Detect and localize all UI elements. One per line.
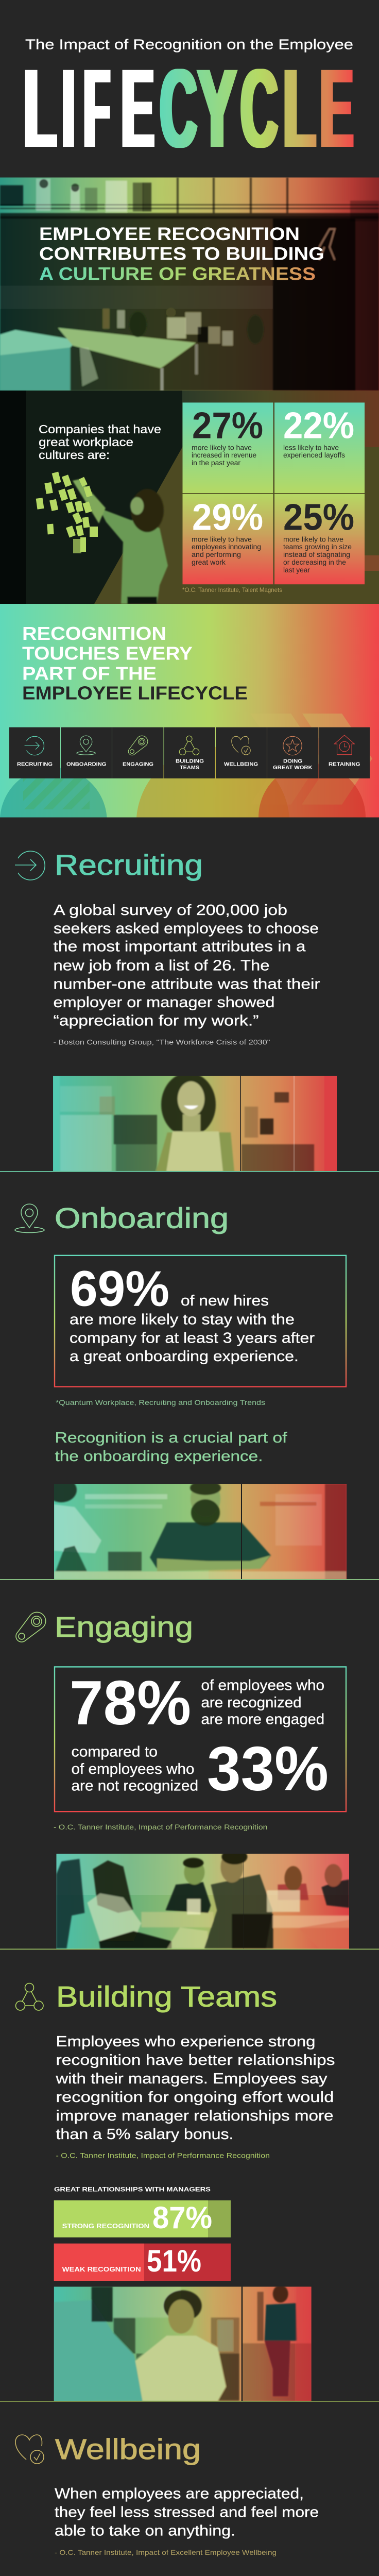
body text: employer or manager showed bbox=[54, 994, 275, 1011]
heading: employee recognition culture bbox=[39, 224, 324, 284]
title: LIFECYCLE: L bbox=[24, 46, 57, 171]
callout box: 69%: are more likely to stay with the bbox=[70, 1311, 295, 1328]
section: onboarding bbox=[15, 1202, 347, 1580]
callout box: 78% vs 33%: are not recognized bbox=[71, 1778, 198, 1794]
body text: “appreciation for my work.” bbox=[54, 1013, 259, 1029]
body text: they feel less stressed and feel more bbox=[55, 2504, 319, 2521]
bar chart: relationship with managers bbox=[54, 2200, 231, 2281]
heading: Onboarding bbox=[55, 1202, 229, 1234]
section: engaging bbox=[16, 1611, 349, 1949]
item: engaging: ENGAGING bbox=[123, 761, 153, 767]
callout box: 69%: 69% bbox=[70, 1261, 169, 1317]
callout box: 78% vs 33% bbox=[55, 1667, 346, 1811]
callout box: 78% vs 33%: of employees who bbox=[201, 1677, 324, 1694]
body text: number-one attribute was that their bbox=[54, 976, 320, 992]
panel: great workplace culture statistics bbox=[39, 402, 365, 594]
body text: recognition have better relationships bbox=[56, 2052, 335, 2069]
highlighted statement: the onboarding experience. bbox=[55, 1448, 263, 1465]
item: doing great work bbox=[273, 736, 313, 771]
heading: TOUCHES EVERY bbox=[22, 642, 193, 664]
stat card: 27%: in the past year bbox=[192, 459, 241, 467]
item: onboarding: ONBOARDING bbox=[66, 761, 107, 767]
stat card: 29%: employees innovating bbox=[192, 543, 261, 551]
stat card: 25%: or decreasing in the bbox=[283, 558, 346, 566]
body text: improve manager relationships more bbox=[56, 2108, 334, 2124]
stat card: 25%: more likely to have bbox=[283, 536, 343, 544]
stat card: 29%: more likely to have bbox=[192, 536, 252, 544]
header: title block bbox=[24, 37, 353, 171]
stat card: 27%: more likely to have bbox=[192, 444, 252, 452]
photo: team around a table bbox=[57, 1854, 349, 1948]
stat card: 29%: and performing bbox=[192, 551, 241, 558]
callout box: 78% vs 33%: are recognized bbox=[201, 1694, 302, 1711]
photo: open office with gradient overlay bbox=[0, 177, 379, 391]
source note: - Boston Consulting Group, "The Workforce Crisis of 2030" bbox=[54, 1038, 270, 1046]
body text: Employees who experience strong bbox=[56, 2033, 315, 2050]
body text: than a 5% salary bonus. bbox=[56, 2126, 234, 2143]
icon: heart with check bbox=[15, 2435, 44, 2464]
stat card: 29%: 29% bbox=[192, 497, 263, 538]
text: intro to stats bbox=[39, 422, 161, 462]
heading: employee recognition culture: CONTRIBUTES TO BUILDING bbox=[39, 244, 324, 264]
body text: the most important attributes in a bbox=[54, 939, 306, 955]
bar: strong recognition 87% bbox=[54, 2200, 231, 2238]
body text bbox=[55, 2486, 319, 2539]
callout box: 78% vs 33%: 33% bbox=[207, 1733, 329, 1803]
stat card: 25%: 25% bbox=[283, 497, 354, 538]
text: intro to stats: great workplace bbox=[39, 435, 133, 449]
body text: When employees are appreciated, bbox=[55, 2486, 304, 2502]
body text bbox=[55, 2033, 335, 2143]
source note: *Quantum Workplace, Recruiting and Onboarding Trends bbox=[56, 1398, 265, 1406]
section: recruiting bbox=[15, 849, 337, 1172]
bar: strong recognition 87%: STRONG RECOGNITION bbox=[62, 2222, 149, 2230]
stat card: 25%: last year bbox=[283, 566, 311, 574]
item: recruiting: RECRUITING bbox=[17, 761, 53, 767]
photo: bearded man writing bbox=[54, 1484, 347, 1579]
callout box: 69% bbox=[55, 1256, 346, 1387]
item: building teams: TEAMS bbox=[180, 765, 199, 771]
stat card: 27%: 27% bbox=[192, 405, 263, 447]
highlighted statement: Recognition is a crucial part of bbox=[55, 1430, 287, 1446]
title: LIFECYCLE bbox=[24, 46, 353, 171]
text: intro to stats: Companies that have bbox=[39, 422, 161, 436]
source note: *O.C. Tanner Institute, Talent Magnets bbox=[182, 586, 282, 594]
text: intro to stats: cultures are: bbox=[39, 448, 110, 462]
body text: recognition for ongoing effort would bbox=[56, 2089, 334, 2106]
callout box: 69%: of new hires bbox=[181, 1293, 269, 1309]
title: LIFECYCLE: L bbox=[283, 46, 316, 171]
item: onboarding bbox=[66, 736, 107, 767]
item: wellbeing: WELLBEING bbox=[224, 761, 258, 767]
body text: A global survey of 200,000 job bbox=[54, 902, 287, 919]
chart label: GREAT RELATIONSHIPS WITH MANAGERS bbox=[54, 2186, 211, 2193]
icon: arrow in circle bbox=[15, 851, 45, 880]
icon: team nodes bbox=[15, 1984, 43, 2010]
item: wellbeing bbox=[224, 736, 258, 767]
title: LIFECYCLE: E bbox=[122, 46, 154, 171]
heading bbox=[22, 623, 248, 704]
item: doing great work: DOING bbox=[283, 758, 302, 765]
body text bbox=[54, 902, 320, 1029]
heading: EMPLOYEE LIFECYCLE bbox=[22, 683, 248, 704]
heading: employee recognition culture: A CULTURE OF GREATNESS bbox=[39, 264, 316, 284]
photo: woman placing sticky notes on a wall bbox=[0, 391, 379, 604]
body text: able to take on anything. bbox=[55, 2523, 235, 2539]
callout box: 78% vs 33%: compared to bbox=[71, 1743, 158, 1760]
title: LIFECYCLE: C bbox=[160, 46, 197, 171]
icon strip navigation bbox=[9, 727, 370, 778]
section: wellbeing bbox=[15, 2433, 338, 2576]
title: LIFECYCLE: C bbox=[241, 46, 278, 171]
callout box: 69%: a great onboarding experience. bbox=[70, 1348, 299, 1365]
heading: Wellbeing bbox=[55, 2433, 201, 2465]
bar: strong recognition 87%: 87% bbox=[152, 2200, 212, 2235]
callout box: 78% vs 33%: 78% bbox=[70, 1668, 191, 1738]
title: LIFECYCLE: F bbox=[84, 46, 110, 171]
heading: employee recognition culture: EMPLOYEE RECOGNITION bbox=[39, 224, 300, 244]
source note: - O.C. Tanner Institute, Impact of Excellent Employee Wellbeing bbox=[55, 2548, 277, 2556]
highlighted statement bbox=[55, 1430, 287, 1465]
stat card: 22%: experienced layoffs bbox=[283, 451, 345, 459]
body text: new job from a list of 26. The bbox=[54, 957, 270, 974]
bar: weak recognition 51%: WEAK RECOGNITION bbox=[62, 2265, 141, 2273]
icon: map pin bbox=[15, 1204, 44, 1232]
section: building teams bbox=[15, 1980, 335, 2401]
source note: - O.C. Tanner Institute, Impact of Performance Recognition bbox=[54, 1823, 268, 1831]
item: retaining: RETAINING bbox=[329, 761, 360, 767]
callout box: 78% vs 33%: of employees who bbox=[71, 1761, 195, 1777]
item: building teams bbox=[176, 736, 204, 771]
stat card: 25%: instead of stagnating bbox=[283, 551, 350, 558]
body text: seekers asked employees to choose bbox=[54, 920, 319, 937]
icon: linked gears bbox=[16, 1612, 46, 1642]
heading: Building Teams bbox=[56, 1980, 277, 2013]
callout box: 69%: company for at least 3 years after bbox=[70, 1330, 315, 1347]
stat card: 27% bbox=[182, 402, 273, 493]
kicker heading: The Impact of Recognition on the Employee bbox=[25, 37, 353, 53]
panel: recognition touches every part of the lifecycle bbox=[0, 604, 379, 817]
stat card: 27%: increased in revenue bbox=[192, 451, 256, 459]
item: recruiting bbox=[17, 736, 53, 767]
item: building teams: BUILDING bbox=[176, 758, 204, 765]
body text: with their managers. Employees say bbox=[55, 2071, 328, 2087]
stat card: 25% bbox=[274, 494, 365, 584]
heading: PART OF THE bbox=[22, 663, 157, 684]
source note: - O.C. Tanner Institute, Impact of Performance Recognition bbox=[56, 2151, 270, 2160]
photo: smiling woman in office bbox=[53, 1076, 337, 1171]
bar: weak recognition 51% bbox=[54, 2244, 231, 2281]
photo: woman talking with colleague bbox=[54, 2286, 312, 2401]
title: LIFECYCLE: Y bbox=[198, 46, 236, 171]
item: engaging bbox=[123, 736, 153, 767]
stat card: 22%: less likely to have bbox=[283, 444, 339, 452]
title: LIFECYCLE: I bbox=[62, 46, 75, 171]
heading: Recruiting bbox=[55, 849, 203, 881]
item: retaining bbox=[329, 735, 360, 767]
stat card: 22% bbox=[274, 402, 365, 493]
stat card: 25%: teams growing in size bbox=[283, 543, 352, 551]
heading: Engaging bbox=[55, 1611, 193, 1643]
item: doing great work: GREAT WORK bbox=[273, 765, 313, 771]
stat card: 22%: 22% bbox=[283, 405, 354, 447]
stat card: 29% bbox=[182, 494, 273, 584]
callout box: 78% vs 33%: are more engaged bbox=[201, 1711, 324, 1727]
bar: weak recognition 51%: 51% bbox=[147, 2244, 201, 2278]
heading: RECOGNITION bbox=[22, 623, 166, 644]
stat card: 29%: great work bbox=[192, 558, 226, 566]
